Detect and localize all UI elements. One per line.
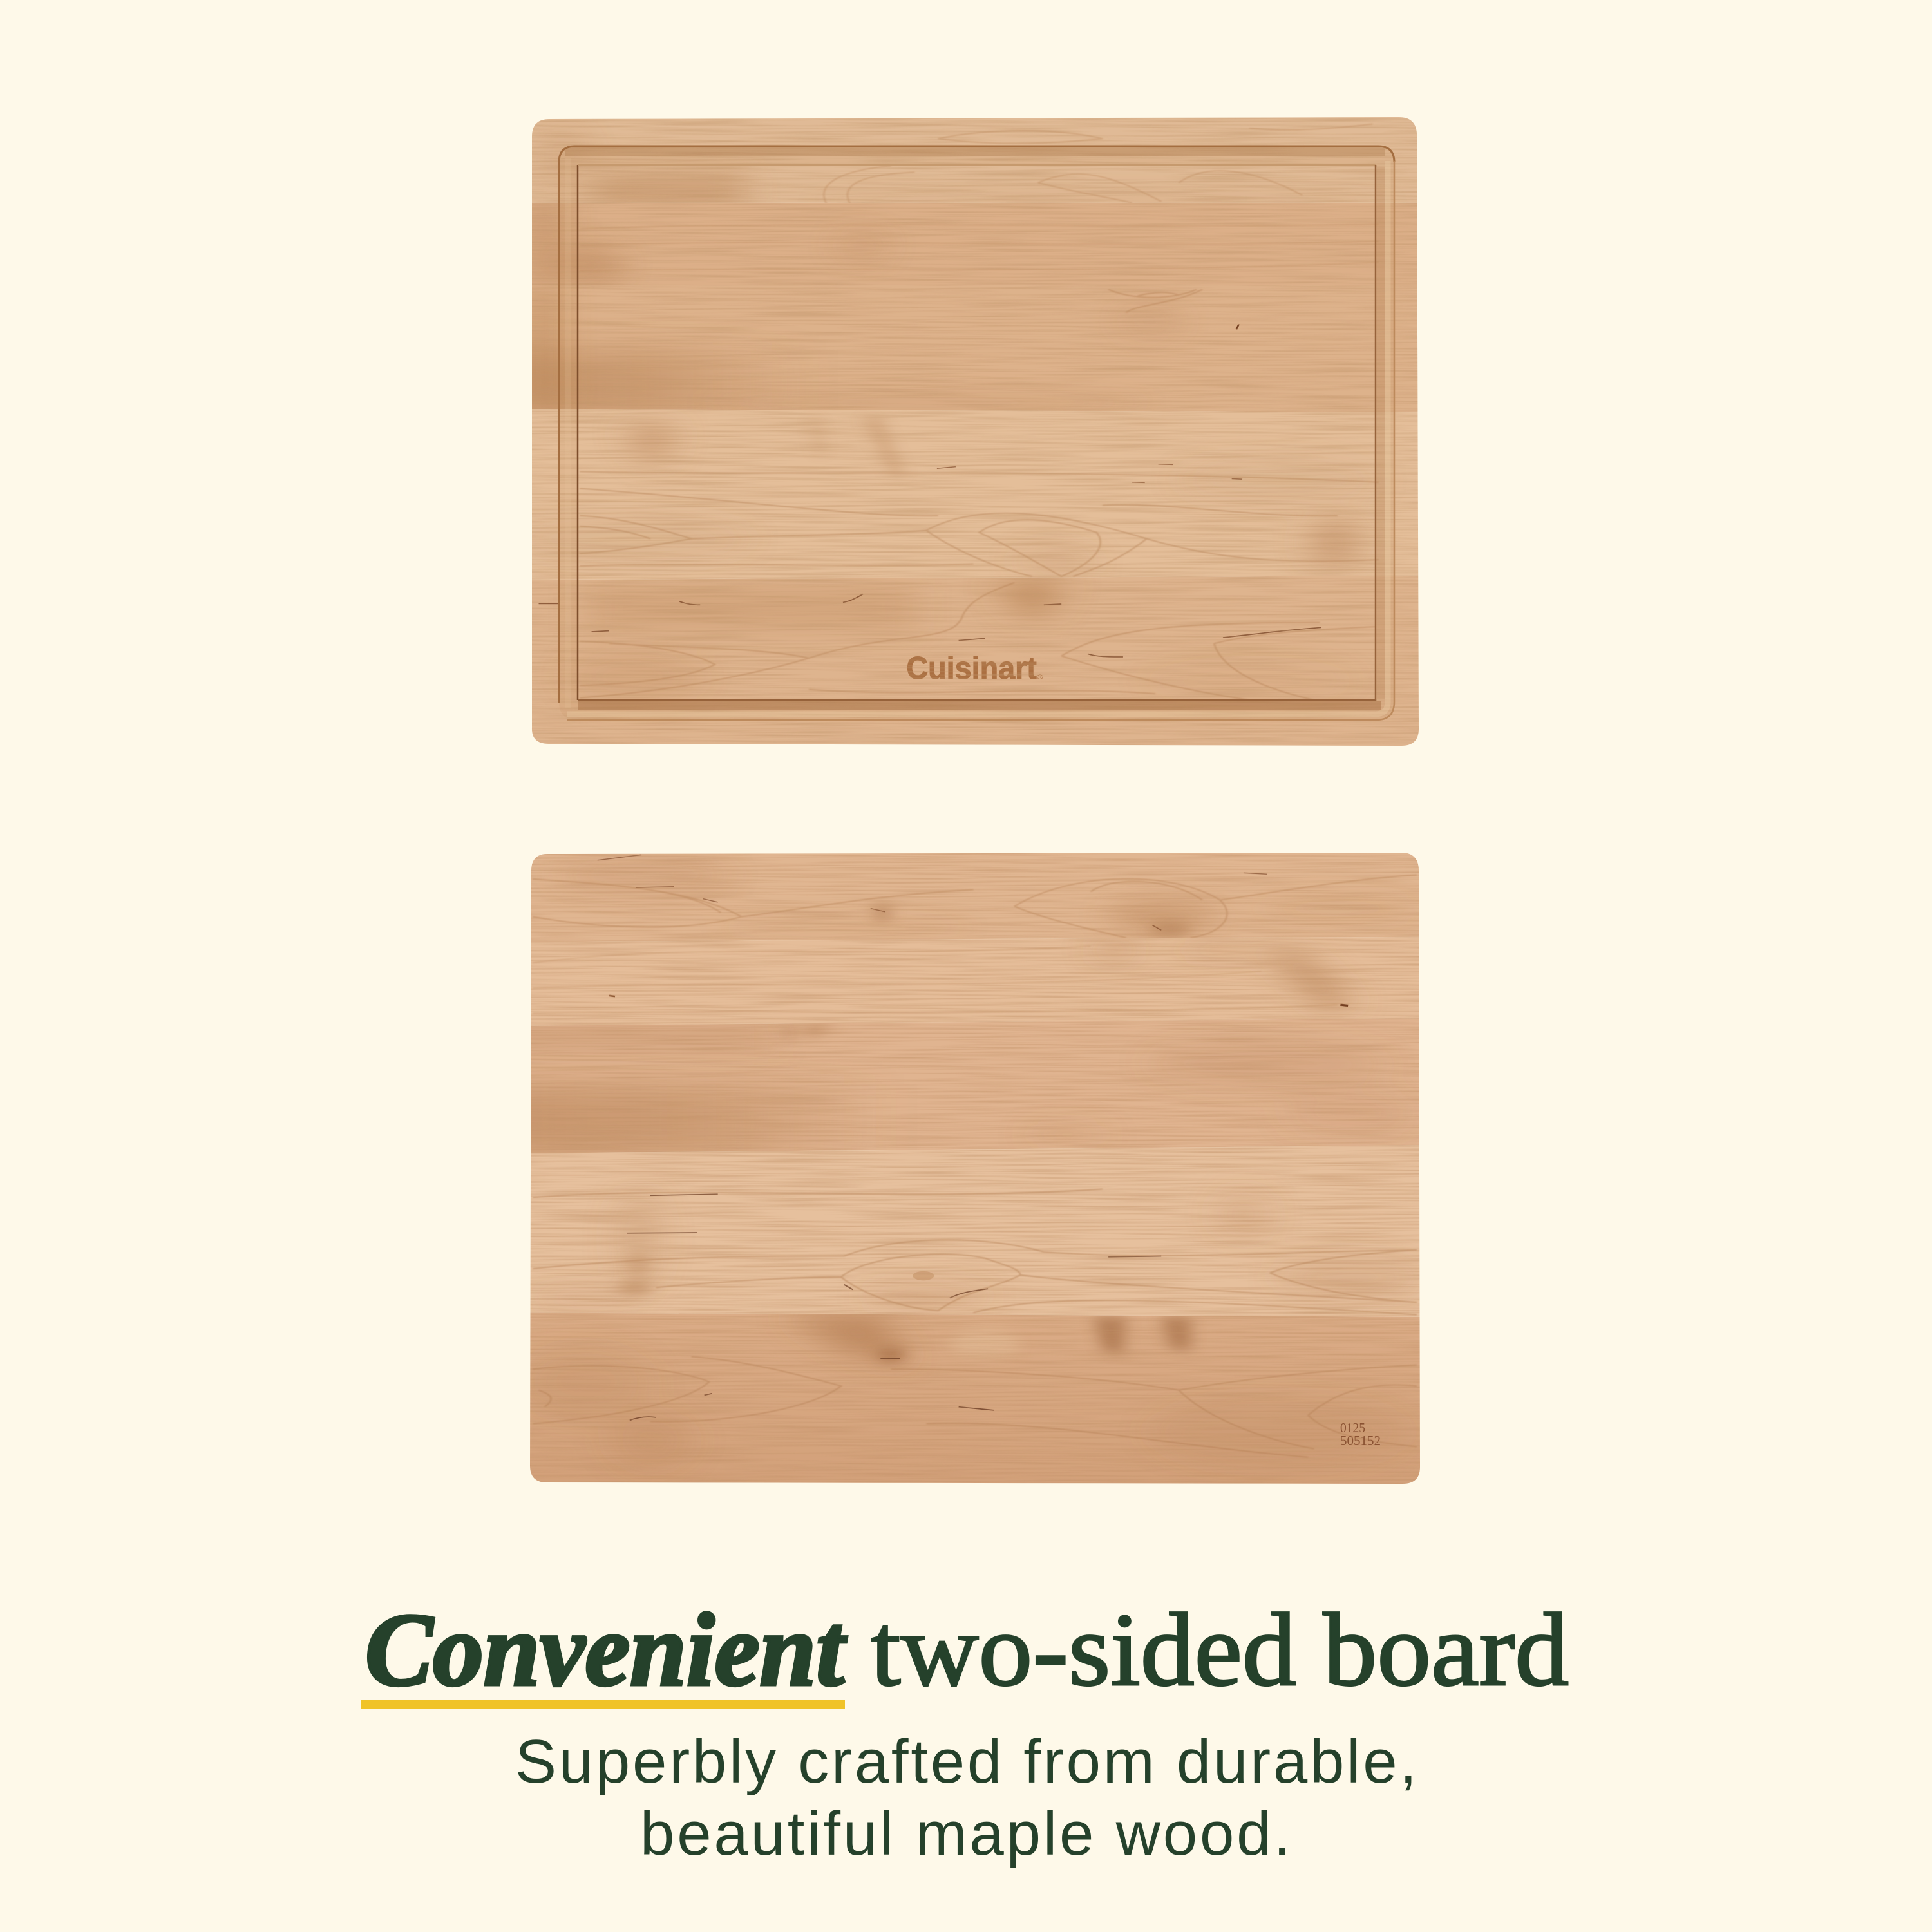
warm tint <box>515 103 1436 760</box>
plank 4 <box>515 1145 1436 1317</box>
wood grain texture <box>515 837 1436 1494</box>
plank 3 <box>480 1018 1436 1160</box>
subtitle <box>515 1727 1417 1868</box>
juice groove <box>559 146 1394 720</box>
plank 1 <box>532 117 1417 203</box>
subtitle line two: beautiful maple wood. <box>640 1799 1291 1868</box>
panel: cutting board, grooved side <box>532 117 1419 746</box>
heading <box>365 1593 1569 1708</box>
plank 2 <box>515 937 1436 1027</box>
heading: remainder: two-sided board <box>871 1593 1569 1708</box>
subtitle line one: Superbly crafted from durable, <box>515 1727 1417 1796</box>
stamp line two: 505152 <box>1340 1433 1381 1448</box>
panel: cutting board, flat side <box>480 837 1436 1494</box>
warm tint <box>515 837 1436 1494</box>
plank 3 <box>532 285 1418 412</box>
plank 5 <box>515 576 1436 760</box>
heading underline <box>361 1700 845 1709</box>
heading: emphasised word: Convenient <box>365 1593 848 1708</box>
plank 2 <box>515 200 1436 287</box>
plank 1 <box>515 837 1436 944</box>
wood grain texture <box>515 103 1436 760</box>
logo: registered mark: ® <box>1037 673 1043 681</box>
plank 4 <box>515 409 1436 581</box>
logo: Cuisinart engraved: Cuisinart <box>906 650 1037 685</box>
plank 5 <box>515 1312 1436 1494</box>
stamp line one: 0125 <box>1340 1420 1365 1435</box>
stamp: batch code <box>1340 1420 1381 1448</box>
